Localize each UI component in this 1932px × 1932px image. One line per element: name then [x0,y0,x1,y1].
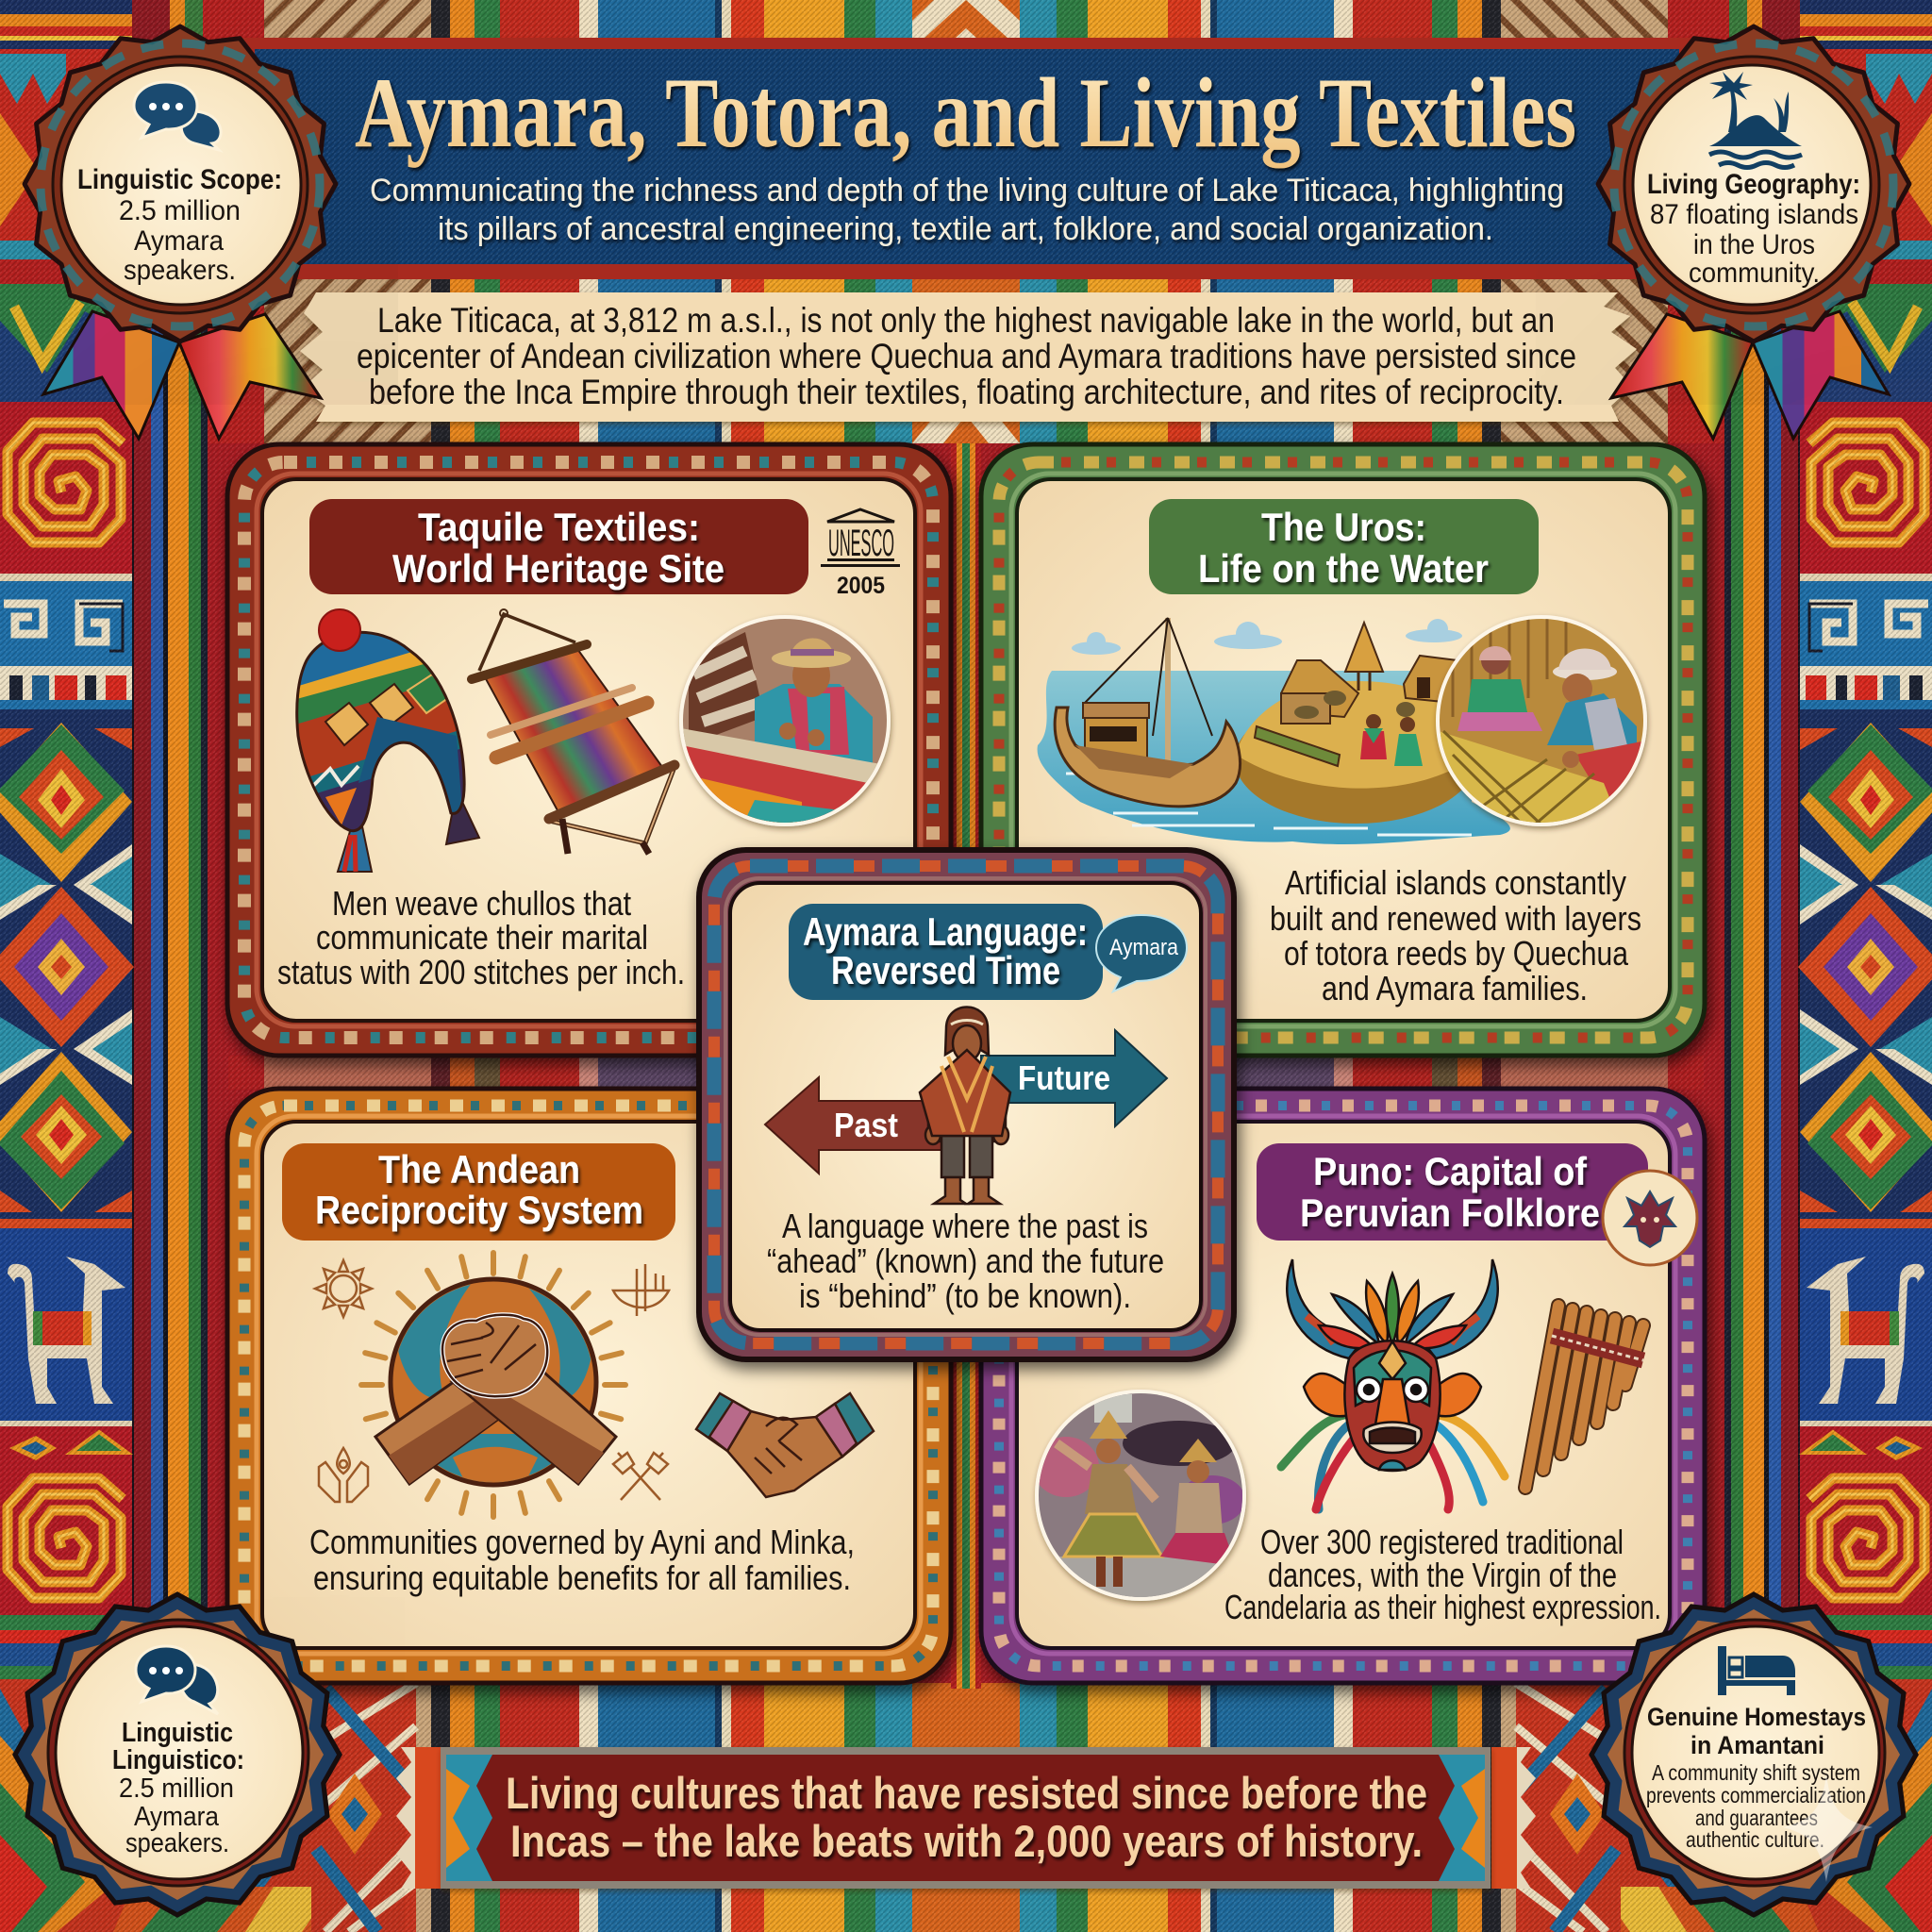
badge: linguistic linguistico: Aymara [134,1802,220,1832]
ribbons [1281,1415,1505,1509]
heading: reciprocity: The Andean [378,1147,580,1191]
subtitle [370,173,1564,247]
floating island [1235,623,1477,824]
intro parchment: epicenter of Andean civilization where Quechua and Aymara traditions have persisted since [357,337,1576,375]
text: Puno body [1224,1523,1661,1626]
left panel: diamonds [0,709,132,1226]
text: Taquile body: status with 200 stitches per inch. [277,953,685,991]
icon: island [1709,72,1802,168]
badge: linguistic linguistico: Linguistico: [112,1745,244,1775]
heading: Aymara language: Aymara Language: [803,909,1088,954]
text: Aymara body: A language where the past is [782,1207,1148,1245]
badge: living geography: community. [1689,258,1820,289]
arrow: past [765,1077,941,1174]
badge: linguistic scope: Linguistic Scope: [77,164,282,195]
photo: weaver [679,613,891,840]
text: Aymara body: is “behind” (to be known). [799,1276,1131,1315]
vertical stripes [132,278,151,1684]
photo: Candelaria dancers [1033,1390,1248,1604]
illustration: lake, reed boat and floating island [1038,618,1510,844]
closing banner: Living cultures that have resisted since before the [506,1768,1427,1818]
header band [226,38,1706,279]
badge: genuine homestays: and guarantees [1695,1806,1818,1830]
text: Taquile body: communicate their marital [316,918,648,957]
panel: Aymara language (centre) [699,850,1234,1359]
badge: linguistic scope: Aymara [134,225,224,257]
sparkle mark [1783,1774,1873,1882]
heading: Puno: Puno: Capital of [1313,1149,1588,1193]
ears [1304,1374,1349,1416]
heading: Uros: Life on the Water [1198,546,1489,591]
bottom-left chevrons [0,1615,132,1932]
bottom diagonal band [311,1683,416,1932]
text: Uros body: of totora reeds by Quechua [1284,934,1629,973]
left panel: spirals [0,402,132,577]
intro parchment: before the Inca Empire through their textiles, floating architecture, and rites of reciprocity. [369,373,1564,411]
ribbons [1611,311,1889,439]
text: reciprocity body [309,1523,855,1597]
icon: handshake [696,1393,874,1497]
badge: linguistic scope [25,26,336,439]
panel: The Uros [981,444,1705,1056]
subtitle: Communicating the richness and depth of the living culture of Lake Titicaca, highlighting [370,173,1564,208]
callout: Aymara bubble: Aymara [1109,935,1179,960]
heading: Aymara language: Reversed Time [831,948,1060,992]
text: reciprocity body: Communities governed by Ayni and Minka, [309,1523,855,1561]
heading: Uros: The Uros: [1261,505,1426,549]
panel: Taquile textiles: UNESCO [828,523,894,564]
heading: Taquile: World Heritage Site [392,546,724,591]
badge: living geography: Living Geography: [1647,169,1860,200]
badge: genuine homestays: A community shift system [1652,1760,1860,1785]
horns [1287,1259,1363,1358]
heading: Puno [1257,1143,1648,1241]
arrow: past: Past [834,1106,898,1144]
intro parchment [300,292,1637,422]
badge: linguistic scope: 2.5 million [119,195,241,226]
text: Puno body: Candelaria as their highest expression. [1224,1588,1661,1626]
ribbons [43,311,321,439]
text: Taquile body [277,884,685,991]
badge: living geography [1598,26,1909,439]
badge: genuine homestays: authentic culture. [1686,1827,1824,1852]
text: Puno body: Over 300 registered traditional [1260,1523,1624,1561]
icon: totora boat glyph [613,1264,669,1316]
icon: offering hands [319,1448,368,1502]
panel: Puno folklore [981,1089,1705,1683]
figures [1360,714,1387,759]
icon: clasped arms emblem [361,1253,625,1517]
badge: living geography: 87 floating islands [1650,199,1858,230]
feathers [1386,1274,1399,1344]
icon: crossed tools [613,1453,668,1500]
heading: Taquile [309,499,808,594]
icon: Aymara figure [920,1008,1010,1204]
tassels [396,1747,441,1889]
text: Uros body [1270,863,1641,1008]
icon: UNESCO temple: 2005 [837,573,885,599]
heading: Taquile: Taquile Textiles: [418,505,700,549]
text: Taquile body: Men weave chullos that [332,884,631,923]
badge: genuine homestays: in Amantani [1690,1731,1824,1759]
badge: genuine homestays: prevents commercialization [1646,1783,1866,1807]
left panel: lower spiral [0,1426,132,1615]
badge: linguistic scope: speakers. [124,255,236,286]
text: Uros body: and Aymara families. [1322,969,1588,1008]
text: Uros body: Artificial islands constantly [1285,863,1626,902]
badge: genuine homestays: Genuine Homestays [1647,1703,1866,1731]
title: Aymara, Totora, and Living Textiles [355,58,1576,168]
icon: chullo hat [283,609,481,872]
icon: bed [1718,1646,1795,1695]
text: reciprocity body: ensuring equitable benefits for all families. [313,1558,851,1597]
panel: Andean reciprocity [227,1089,951,1683]
heading: Uros [1149,499,1539,594]
intro parchment: Lake Titicaca, at 3,812 m a.s.l., is not only the highest navigable lake in the world, but an [377,301,1555,340]
face [1344,1341,1441,1471]
icon: panpipes [1525,1306,1643,1488]
badge: living geography: in the Uros [1693,229,1815,260]
arrow: future: Future [1018,1058,1110,1097]
heading: reciprocity [282,1143,675,1241]
heading: Puno: Peruvian Folklore [1300,1191,1600,1235]
closing banner: Incas – the lake beats with 2,000 years of history. [510,1816,1423,1866]
top-left block [0,0,132,49]
central vertical gap [951,443,966,1689]
badge: genuine homestays [1591,1594,1916,1915]
icon: sun [315,1260,372,1317]
badge: linguistic linguistico [15,1594,340,1915]
icon: speech bubbles [134,82,221,150]
badge: linguistic linguistico: speakers. [125,1828,229,1858]
heading: reciprocity: Reciprocity System [315,1188,643,1232]
badge: linguistic linguistico: 2.5 million [119,1774,234,1804]
reed boat [1055,618,1241,807]
subtitle: its pillars of ancestral engineering, textile art, folklore, and social organization. [438,211,1493,247]
closing banner [396,1747,1536,1889]
text: Puno body: dances, with the Virgin of the [1268,1556,1617,1594]
left panel: fret band [0,574,132,581]
icon: UNESCO temple [821,509,900,599]
panel: Taquile textiles [227,444,951,1056]
heading: Aymara language [789,904,1103,1000]
icon: backstrap loom [472,609,675,854]
left panel: llama [0,1228,132,1421]
callout: Aymara bubble [1096,915,1187,991]
icon: folklore seal [1603,1171,1697,1265]
arrow: future [981,1030,1167,1126]
text: Aymara body [767,1207,1164,1315]
badge: linguistic linguistico: Linguistic [122,1718,233,1748]
text: Uros body: built and renewed with layers [1270,899,1641,938]
icon: speech bubbles [136,1646,218,1714]
photo: reed weavers [1434,613,1651,830]
icon: diablada mask [1281,1259,1505,1509]
text: Aymara body: “ahead” (known) and the future [767,1241,1164,1280]
